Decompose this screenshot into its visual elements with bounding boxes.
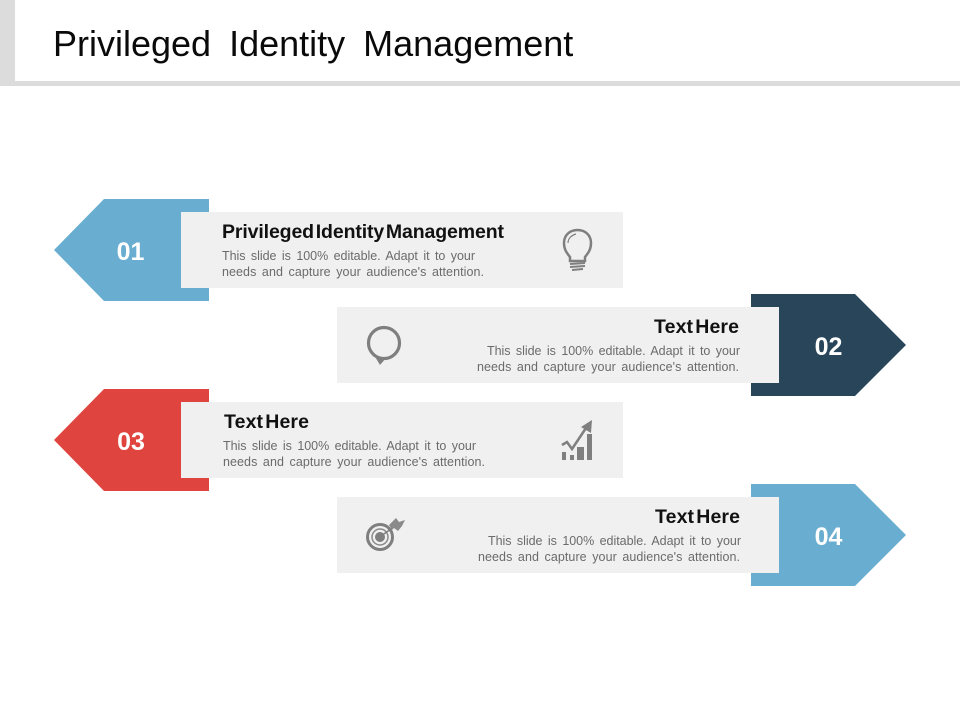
title: Privileged Identity Management: [53, 23, 573, 64]
number: 03: 03: [117, 428, 145, 456]
heading: 02: Text Here: [654, 316, 739, 338]
card: 02: [337, 307, 779, 383]
card: 04: [337, 497, 779, 573]
panel: step 04: [337, 484, 906, 586]
card: 03: [181, 402, 623, 478]
icon: growth chart: [562, 420, 592, 460]
arrow: 02: [751, 294, 906, 396]
arrow: 01: [54, 199, 209, 301]
text block: 03: This slide is 100% editable. Adapt it to your: [223, 439, 476, 453]
panel: step 01: [54, 199, 623, 301]
text block: 04: [478, 534, 741, 564]
arrow: 03: [54, 389, 209, 491]
number: 04: 04: [815, 523, 842, 551]
number: 02: 02: [815, 333, 842, 361]
header band: [0, 0, 960, 86]
text block: 04: needs and capture your audience's attention.: [478, 550, 740, 564]
text block: 02: This slide is 100% editable. Adapt it to your: [487, 344, 740, 358]
text block: 03: [223, 439, 485, 469]
text block: 04: This slide is 100% editable. Adapt it to your: [488, 534, 741, 548]
icon: target with dart: [368, 518, 405, 550]
panel: step 03: [54, 389, 623, 491]
icon: speech circle: [368, 328, 400, 365]
text block: 01: [222, 249, 484, 279]
number: 01: 01: [117, 238, 144, 266]
text block: 02: needs and capture your audience's attention.: [477, 360, 739, 374]
text block: 02: [477, 344, 740, 374]
text block: 01: needs and capture your audience's attention.: [222, 265, 484, 279]
heading: 01: Privileged Identity Management: [222, 221, 504, 243]
panel: step 02: [337, 294, 906, 396]
icon: light bulb: [564, 230, 591, 270]
text block: 01: This slide is 100% editable. Adapt it to your: [222, 249, 475, 263]
heading: 03: Text Here: [224, 411, 309, 433]
card: 01: [181, 212, 623, 288]
heading: 04: Text Here: [655, 506, 740, 528]
arrow: 04: [751, 484, 906, 586]
text block: 03: needs and capture your audience's attention.: [223, 455, 485, 469]
